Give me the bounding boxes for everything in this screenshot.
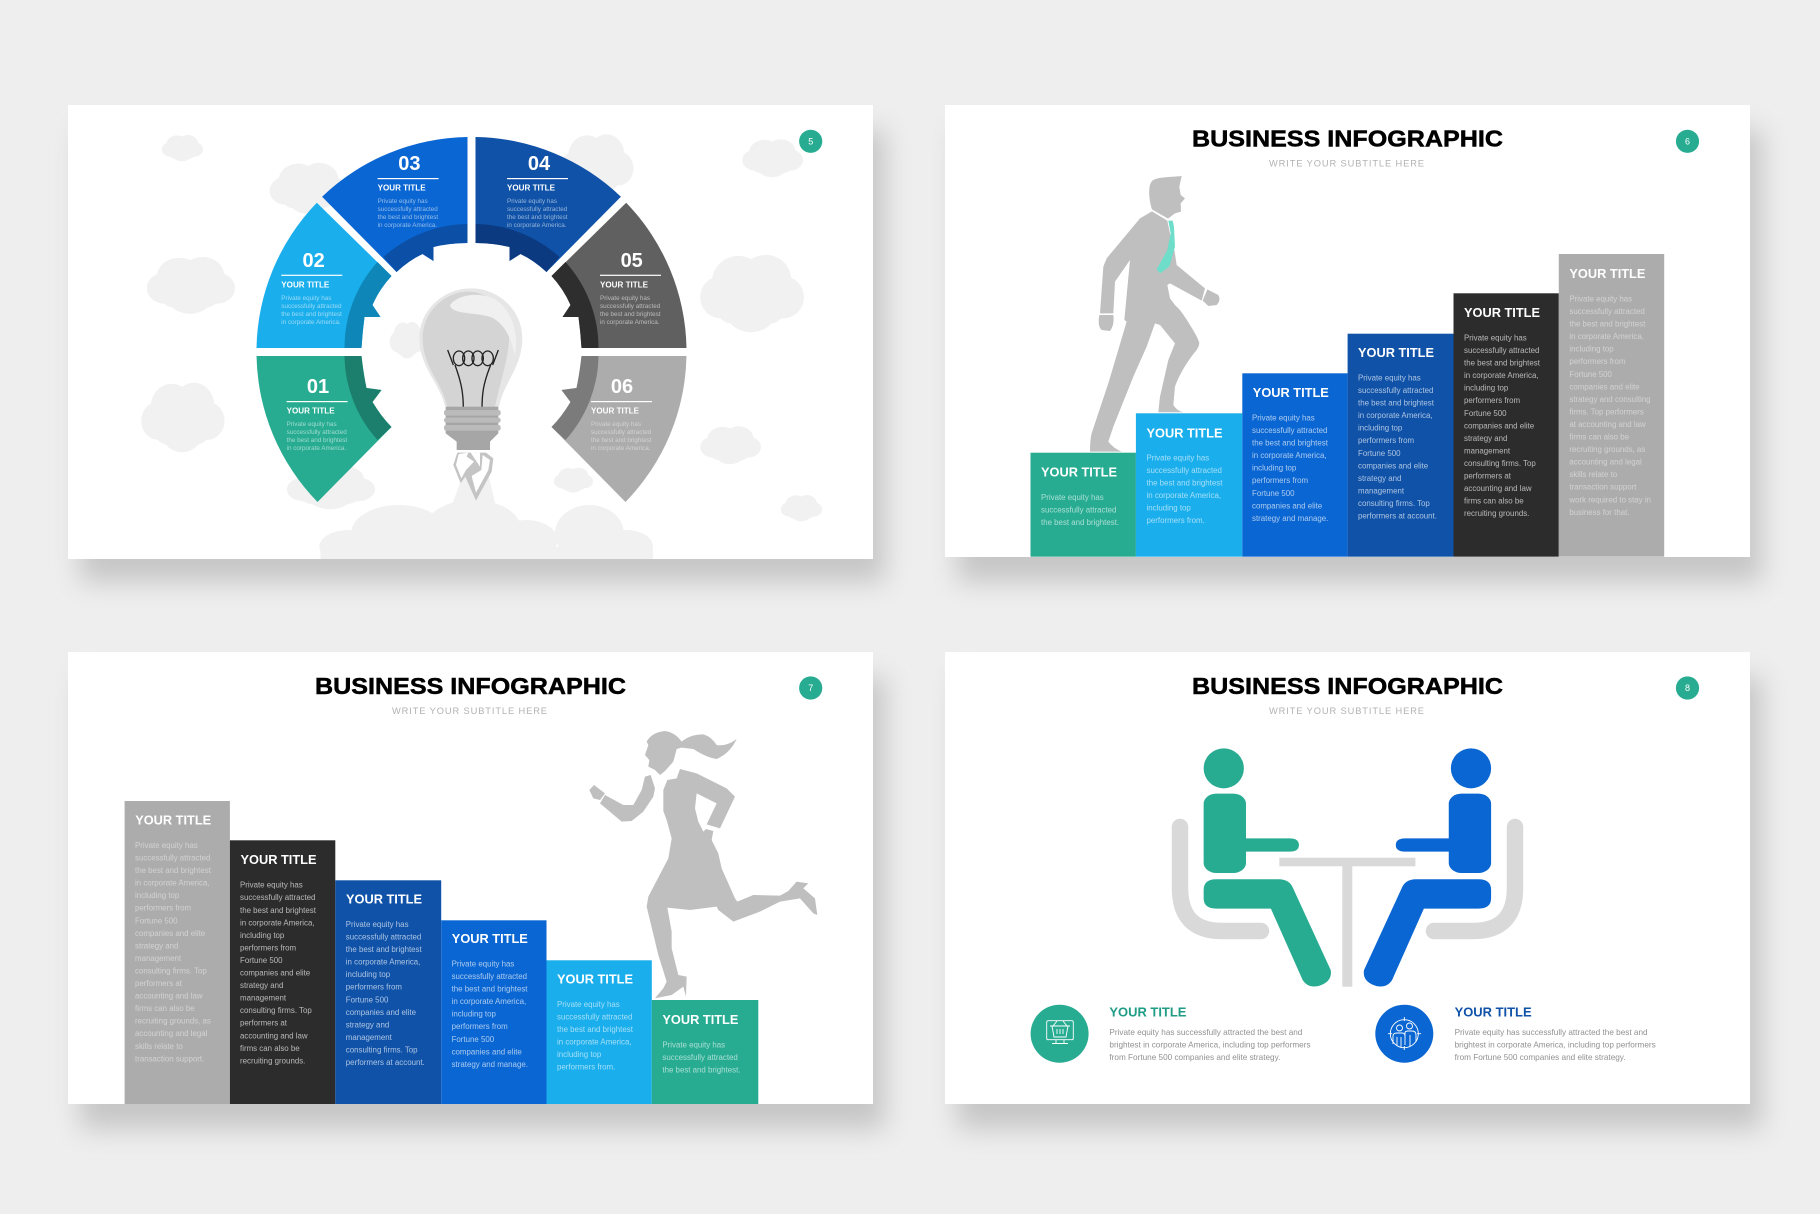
page badge 8 [1676,676,1699,700]
step 6: recruiting grounds, as [1569,445,1645,454]
step dark: Fortune 500 [240,956,283,965]
segment text 01: Private equity has [287,421,337,428]
step gray: the best and brightest [135,866,212,875]
segment 03 [322,137,468,272]
step 3: companies and elite [1252,501,1323,510]
step 5: YOUR TITLE [1464,305,1540,320]
step sky blue: the best and brightest [557,1025,634,1034]
step 6: firms can also be [1569,432,1630,442]
step 6: transaction support [1569,483,1637,492]
step 5: accounting and law [1464,484,1532,493]
step blue: companies and elite [452,1047,522,1056]
step gray: YOUR TITLE [135,813,212,828]
subtitle: WRITE YOUR SUBTITLE HERE [1269,706,1424,716]
title: BUSINESS INFOGRAPHIC [315,673,626,699]
step 5: firms can also be [1464,497,1524,506]
icon: lightbulb rocket [419,288,522,510]
subtitle: WRITE YOUR SUBTITLE HERE [392,706,547,716]
step 6: performers from [1569,357,1626,366]
step 6: work required to stay in [1568,495,1651,504]
segment text 03: 03 [398,153,421,175]
slide shadows [80,130,1762,1129]
step 6: the best and brightest [1569,320,1646,329]
step 2: in corporate America, [1146,491,1221,500]
title: BUSINESS INFOGRAPHIC [1192,673,1503,699]
step 5: management [1464,446,1511,455]
segment text 01 [287,376,348,452]
panel: climbing stairs slide [945,105,1750,557]
segment 01 [256,356,392,502]
segment text 02: 02 [302,250,325,272]
step gray: successfully attracted [135,854,210,862]
step dark blue: in corporate America, [346,958,420,967]
step 3: in corporate America, [1252,451,1327,460]
step teal [652,1000,758,1104]
woman silhouette [589,731,817,998]
step gray: consulting firms. Top [135,966,207,976]
step dark blue: Fortune 500 [346,995,389,1004]
step 3: Private equity has [1252,414,1315,422]
step 6: companies and elite [1569,382,1640,391]
step 2: successfully attracted [1146,466,1222,475]
step gray: Private equity has [135,841,198,850]
segment text 05: the best and brightest [600,311,661,318]
step 6: successfully attracted [1569,307,1645,316]
segment text 02 [281,250,342,326]
step 6: accounting and legal [1569,458,1642,467]
step 1: the best and brightest. [1041,518,1119,527]
segment text 01: the best and brightest [287,437,347,444]
segment text 04: YOUR TITLE [507,183,555,193]
step dark blue: performers from [346,983,402,992]
text: blue item [1455,1005,1656,1062]
segment text 03: YOUR TITLE [378,183,426,193]
segment text 02: successfully attracted [281,303,342,310]
step 6: YOUR TITLE [1569,266,1646,281]
step gray: in corporate America, [135,879,210,888]
man silhouette [1090,176,1219,452]
step dark blue: Private equity has [346,920,409,929]
text: blue item: YOUR TITLE [1455,1005,1532,1020]
step 4: in corporate America, [1358,411,1433,420]
slide background [68,105,873,559]
panel: descending stairs slide [68,652,873,1104]
segment 04 [476,137,621,272]
step dark: performers from [240,943,297,952]
step gray: accounting and law [135,992,203,1001]
text: teal item: YOUR TITLE [1109,1005,1187,1020]
step 4: companies and elite [1358,461,1429,470]
segment text 03: Private equity has [378,198,428,205]
step 4: the best and brightest [1358,399,1435,408]
text: blue item: Private equity has successfully attracted the best and [1455,1028,1648,1037]
page badge 6: 6 [1685,136,1690,146]
step 5: Private equity has [1464,334,1527,342]
step 3 [1242,373,1348,557]
person: blue [1364,748,1491,986]
step blue: in corporate America, [452,997,526,1006]
title: BUSINESS INFOGRAPHIC [1192,126,1503,152]
step gray: performers at [135,979,183,988]
step teal: successfully attracted [662,1053,738,1062]
segment text 04 [507,153,568,229]
step teal: Private equity has [662,1040,725,1050]
step gray: accounting and legal [135,1029,208,1038]
segment 02 [256,203,392,348]
segment text 05: 05 [621,250,643,272]
step 5: performers from [1464,396,1521,405]
step blue: Private equity has [452,960,514,968]
step 6: Private equity has [1569,294,1632,304]
segment text 06 [591,376,652,452]
segment text 06: in corporate America. [591,445,651,452]
segment text 06: the best and brightest [591,437,652,444]
text: teal item: brightest in corporate America, including top performers [1109,1041,1311,1050]
segment text 04: successfully attracted [507,206,568,213]
segment text 02: Private equity has [281,295,331,302]
step 4 [1348,334,1454,557]
segment text 01: 01 [307,376,329,398]
step blue: the best and brightest [452,985,528,994]
step 1: successfully attracted [1041,506,1116,515]
segment text 04: the best and brightest [507,214,568,221]
step dark: consulting firms. Top [240,1006,312,1015]
step 1: Private equity has [1041,493,1104,502]
step dark blue: consulting firms. Top [346,1046,418,1054]
text: blue item: brightest in corporate America, including top performers [1455,1041,1656,1050]
text: blue item: from Fortune 500 companies and elite strategy. [1455,1053,1626,1062]
step 4: strategy and [1358,474,1401,483]
step dark: firms can also be [240,1044,300,1053]
segment text 06: successfully attracted [591,429,652,436]
step blue: strategy and manage. [452,1060,528,1069]
segment 06 [552,356,686,502]
step 3: the best and brightest [1252,439,1329,448]
step dark blue [335,880,441,1104]
step dark blue: performers at account. [346,1058,425,1067]
step dark: performers at [240,1019,288,1028]
step 2: performers from. [1146,516,1205,525]
segment text 01: successfully attracted [287,429,347,436]
step 6: firms. Top performers [1569,407,1644,416]
step sky blue: Private equity has [557,1000,620,1009]
step 3: YOUR TITLE [1253,385,1329,400]
subtitle: WRITE YOUR SUBTITLE HERE [1269,159,1424,169]
step dark blue: including top [346,970,391,979]
segment text 04: Private equity has [507,198,557,205]
segment 05 [552,203,686,348]
segment text 03 [378,153,439,229]
step 2: the best and brightest [1146,479,1223,488]
step dark: the best and brightest [240,906,317,915]
step sky blue [546,960,652,1104]
page badge 6 [1676,130,1699,153]
step 4: performers from [1358,436,1415,445]
step dark blue: successfully attracted [346,932,421,942]
decorative clouds [141,134,822,567]
step 5 [1454,293,1559,557]
step teal: the best and brightest. [662,1066,740,1075]
step dark: Private equity has [240,881,303,890]
segment text 02: the best and brightest [281,311,342,318]
step sky blue: successfully attracted [557,1012,632,1022]
step 6: at accounting and law [1569,420,1646,429]
slide background [68,652,873,1104]
step blue [441,920,546,1104]
step blue: performers from [452,1022,508,1031]
segment text 06: YOUR TITLE [591,406,639,416]
segment text 06: Private equity has [591,421,641,428]
step 5: including top [1464,384,1509,393]
step dark: YOUR TITLE [240,852,317,867]
text: teal item [1109,1005,1311,1062]
panel: lightbulb ring slide [68,105,873,567]
table [1279,858,1415,987]
step blue: YOUR TITLE [452,931,528,946]
step 4: management [1358,486,1405,495]
step gray: firms can also be [135,1004,195,1013]
step 2: YOUR TITLE [1146,425,1223,440]
step 6: Fortune 500 [1569,370,1613,379]
segment text 01: in corporate America. [287,445,346,452]
step 1: YOUR TITLE [1041,465,1117,480]
step 5: strategy and [1464,434,1507,443]
step 3: including top [1252,464,1297,473]
step gray: skills relate to [135,1042,183,1051]
step gray: transaction support. [135,1054,204,1063]
step dark: accounting and law [240,1031,308,1040]
segment text 02: in corporate America. [281,319,341,326]
step dark: successfully attracted [240,893,315,902]
step 3: performers from [1252,476,1309,485]
step 2: Private equity has [1146,454,1209,462]
step 3: strategy and manage. [1252,514,1328,523]
step gray [125,801,230,1104]
step 6: including top [1569,345,1614,354]
segment text 05 [600,250,661,326]
step gray: management [135,954,182,963]
page badge 5: 5 [808,136,813,146]
segment text 03: the best and brightest [378,214,438,221]
step dark: strategy and [240,981,283,990]
segment text 04: in corporate America. [507,222,567,229]
step 6: skills relate to [1569,470,1618,479]
step dark [230,840,335,1104]
step sky blue: performers from. [557,1063,615,1072]
step 6: in corporate America, [1569,332,1644,341]
step dark blue: YOUR TITLE [346,892,422,906]
step 4: including top [1358,424,1403,433]
segment text 05: successfully attracted [600,303,661,310]
step 5: companies and elite [1464,421,1535,430]
step 6: strategy and consulting [1569,395,1651,404]
step 4: successfully attracted [1358,386,1433,395]
step dark blue: companies and elite [346,1008,417,1017]
step 4: performers at account. [1358,512,1437,520]
step dark blue: strategy and [346,1020,389,1029]
step dark blue: the best and brightest [346,945,422,954]
step gray: companies and elite [135,929,206,938]
slide background [945,652,1750,1104]
step blue: successfully attracted [452,972,527,981]
step gray: including top [135,891,180,900]
step 4: consulting firms. Top [1358,499,1430,508]
step 5: performers at [1464,472,1512,480]
segment text 05: in corporate America. [600,319,660,326]
step sky blue: including top [557,1050,602,1059]
step 5: consulting firms. Top [1464,459,1536,468]
step 2 [1136,413,1242,557]
icon: people target [1375,1005,1433,1063]
segment text 05: Private equity has [600,295,650,302]
panel: meeting slide [945,652,1750,1104]
segment text 03: successfully attracted [378,206,438,213]
step dark: management [240,994,287,1003]
chairs [1180,827,1515,931]
text: teal item: from Fortune 500 companies and elite strategy. [1109,1053,1280,1062]
step 4: Private equity has [1358,374,1421,382]
step gray: Fortune 500 [135,916,178,925]
step 6: business for that. [1569,508,1629,517]
step 3: successfully attracted [1252,426,1327,435]
page badge 5 [799,130,822,153]
segment text 03: in corporate America. [378,222,437,229]
step sky blue: YOUR TITLE [557,972,633,986]
step 5: in corporate America, [1464,371,1539,380]
step sky blue: in corporate America, [557,1038,632,1047]
step 4: YOUR TITLE [1358,345,1434,360]
step dark: companies and elite [240,968,311,978]
page badge 7: 7 [808,683,813,693]
slide background [945,105,1750,557]
step 6 [1559,254,1664,557]
step 5: successfully attracted [1464,346,1539,355]
segment text 06: 06 [611,376,633,398]
step dark: recruiting grounds. [240,1056,305,1065]
segment text 01: YOUR TITLE [287,406,335,416]
segment text 02: YOUR TITLE [281,280,330,290]
step 5: recruiting grounds. [1464,509,1529,518]
step 2: including top [1146,504,1191,513]
step gray: performers from [135,904,192,913]
step blue: Fortune 500 [452,1035,495,1044]
step 5: Fortune 500 [1464,409,1507,418]
person: teal [1204,748,1331,986]
segment text 05: YOUR TITLE [600,280,648,290]
step dark blue: management [346,1033,393,1042]
text: teal item: Private equity has successfully attracted the best and [1109,1028,1303,1037]
step 3: Fortune 500 [1252,489,1295,498]
step gray: strategy and [135,941,178,950]
step blue: including top [452,1010,497,1019]
ring segments [256,137,686,502]
step gray: recruiting grounds, as [135,1017,211,1026]
icon: shopping basket monitor [1031,1005,1089,1063]
step 5: the best and brightest [1464,359,1541,368]
page badge 7 [799,676,822,700]
step dark: in corporate America, [240,918,315,927]
step 4: Fortune 500 [1358,449,1401,458]
segment text 04: 04 [528,153,551,175]
step 1 [1030,453,1136,557]
step dark: including top [240,931,285,940]
step teal: YOUR TITLE [662,1012,739,1027]
page badge 8: 8 [1685,683,1690,693]
